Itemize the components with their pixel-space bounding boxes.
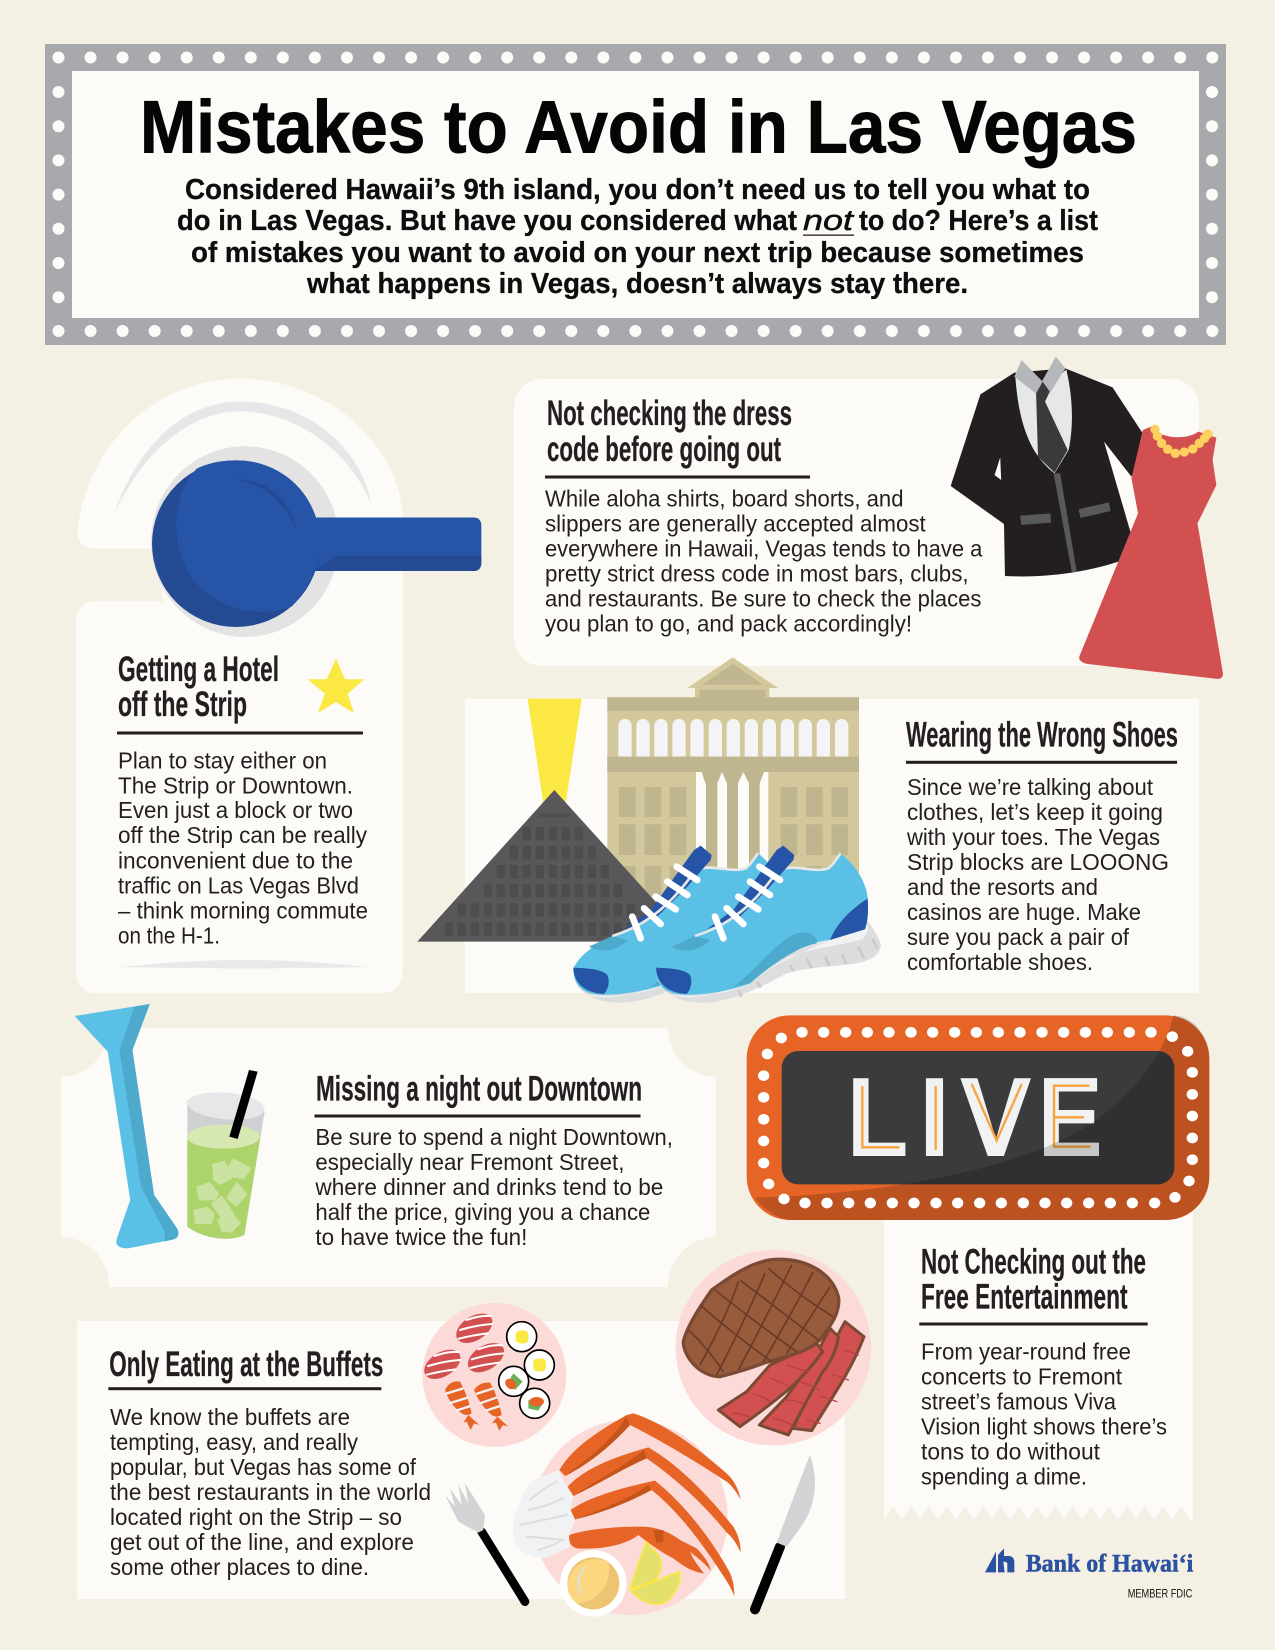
body text: wrong shoes: Since we’re talking about (907, 774, 1154, 800)
body text: downtown: Be sure to spend a night Downtown, (315, 1124, 673, 1150)
body text: free entertainment: tons to do without (921, 1438, 1101, 1464)
body text: free entertainment (921, 1338, 1167, 1489)
body text: wrong shoes: clothes, let’s keep it going (907, 799, 1163, 825)
body text: free entertainment: spending a dime. (921, 1463, 1087, 1489)
left shoe (573, 846, 798, 1003)
heading: downtown (314, 1070, 642, 1118)
intro text: do in Las Vegas. But have you considered what (177, 205, 797, 237)
icon: crab legs plate (513, 1413, 741, 1617)
heading: dress code: code before going out (547, 430, 781, 469)
body text: dress code: pretty strict dress code in most bars, clubs, (545, 561, 969, 587)
icon: pyramid with light beam (417, 699, 692, 942)
body text: wrong shoes: sure you pack a pair of (907, 924, 1130, 950)
panel: dress code (514, 357, 1223, 679)
body text: buffets: located right on the Strip – so (110, 1504, 402, 1530)
icon: tuxedo jacket (951, 357, 1143, 576)
LIVE lettering: E (1038, 1055, 1102, 1179)
body text: buffets: tempting, easy, and really (110, 1429, 358, 1455)
body text: wrong shoes: casinos are huge. Make (907, 899, 1141, 925)
heading: free entertainment: Not Checking out the (921, 1242, 1146, 1281)
body text: hotel: on the H-1. (118, 922, 220, 948)
body text: hotel: Even just a block or two (118, 797, 353, 823)
logo: Bank of Hawaii (985, 1548, 1193, 1601)
bank name: Bank of Hawai‘i (1026, 1551, 1193, 1578)
marquee header panel (45, 44, 1226, 345)
body text: buffets (110, 1404, 431, 1580)
icon: knife (755, 1455, 815, 1609)
panel: buffets (77, 1250, 871, 1617)
right shoe (656, 846, 881, 1003)
body text: dress code: everywhere in Hawaii, Vegas tends to have a (545, 536, 982, 562)
heading: hotel (117, 650, 363, 734)
body text: buffets: We know the buffets are (110, 1404, 350, 1430)
heading: buffets: Only Eating at the Buffets (109, 1345, 383, 1384)
body text: wrong shoes: Strip blocks are LOOONG (907, 849, 1169, 875)
body text: free entertainment: From year-round free (921, 1338, 1131, 1364)
body text: hotel: The Strip or Downtown. (118, 772, 353, 798)
body text: buffets: the best restaurants in the world (110, 1479, 431, 1505)
body text: wrong shoes: with your toes. The Vegas (906, 824, 1160, 850)
body text: downtown: half the price, giving you a chance (315, 1199, 650, 1225)
intro text: to do? Here’s a list (859, 205, 1098, 237)
icon: red dress (1079, 425, 1223, 679)
heading: wrong shoes (906, 716, 1178, 764)
title: Mistakes to Avoid in Las Vegas (140, 86, 1137, 168)
intro text (177, 174, 1098, 300)
intro text: Considered Hawaii’s 9th island, you don’t need us to tell you what to (185, 174, 1090, 206)
body text: buffets: get out of the line, and explore (110, 1529, 414, 1555)
door hanger card shape (76, 379, 403, 993)
icon: steak plate (676, 1250, 871, 1445)
body text: hotel: – think morning commute (118, 897, 368, 923)
icon: casino building (607, 657, 859, 917)
body text: free entertainment: Vision light shows there’s (921, 1413, 1167, 1439)
heading: hotel: off the Strip (118, 685, 247, 724)
body text: dress code: While aloha shirts, board shorts, and (545, 486, 904, 512)
body text: dress code (545, 486, 982, 637)
icon: sushi plate (419, 1303, 566, 1447)
body text: free entertainment: street’s famous Viva (921, 1388, 1116, 1414)
body text: downtown: to have twice the fun! (315, 1224, 527, 1250)
body text: wrong shoes: and the resorts and (907, 874, 1098, 900)
heading: downtown: Missing a night out Downtown (316, 1070, 642, 1109)
heading: free entertainment: Free Entertainment (921, 1277, 1128, 1316)
panel: free entertainment (884, 1200, 1193, 1520)
intro text: not (803, 205, 855, 237)
logo mark (985, 1548, 1014, 1572)
body text: downtown (314, 1124, 673, 1250)
icon: cocktail stirrer (75, 1004, 178, 1248)
body text: hotel (118, 747, 368, 948)
LIVE lettering: L (847, 1055, 908, 1179)
heading: free entertainment (919, 1242, 1148, 1326)
intro text: of mistakes you want to avoid on your next trip because sometimes (191, 237, 1084, 269)
LIVE lettering: V (960, 1055, 1031, 1179)
body text: dress code: you plan to go, and pack accordingly! (545, 611, 912, 637)
heading: dress code: Not checking the dress (547, 394, 792, 433)
icon: running shoes (573, 846, 881, 1003)
panel: hotel door hanger (76, 379, 481, 993)
panel: wrong shoes (417, 657, 1199, 1003)
body text: hotel: Plan to stay either on (118, 747, 327, 773)
icon: door knob (113, 401, 481, 637)
body text: wrong shoes (906, 774, 1169, 975)
LIVE lettering (847, 1055, 1102, 1179)
icon: green drink (186, 1070, 266, 1239)
heading: buffets (108, 1345, 383, 1390)
icon: star (308, 659, 364, 713)
heading: dress code (545, 394, 810, 478)
LIVE lettering: I (919, 1055, 950, 1179)
icon: fork (445, 1483, 525, 1602)
icon: LIVE marquee sign (747, 1015, 1209, 1220)
panel: night out downtown (61, 1004, 716, 1287)
heading: hotel: Getting a Hotel (118, 650, 279, 689)
body text: free entertainment: concerts to Fremont (921, 1363, 1123, 1389)
body text: hotel: inconvenient due to the (118, 847, 353, 873)
intro text: what happens in Vegas, doesn’t always stay there. (306, 268, 968, 300)
body text: downtown: where dinner and drinks tend to be (314, 1174, 663, 1200)
body text: buffets: popular, but Vegas has some of (110, 1454, 417, 1480)
FDIC note: MEMBER FDIC (1128, 1589, 1192, 1601)
body text: dress code: slippers are generally accepted almost (545, 511, 926, 537)
body text: wrong shoes: comfortable shoes. (907, 949, 1093, 975)
body text: dress code: and restaurants. Be sure to check the places (545, 586, 981, 612)
body text: hotel: traffic on Las Vegas Blvd (118, 872, 359, 898)
body text: hotel: off the Strip can be really (118, 822, 367, 848)
body text: downtown: especially near Fremont Street, (315, 1149, 624, 1175)
body text: buffets: some other places to dine. (110, 1554, 369, 1580)
